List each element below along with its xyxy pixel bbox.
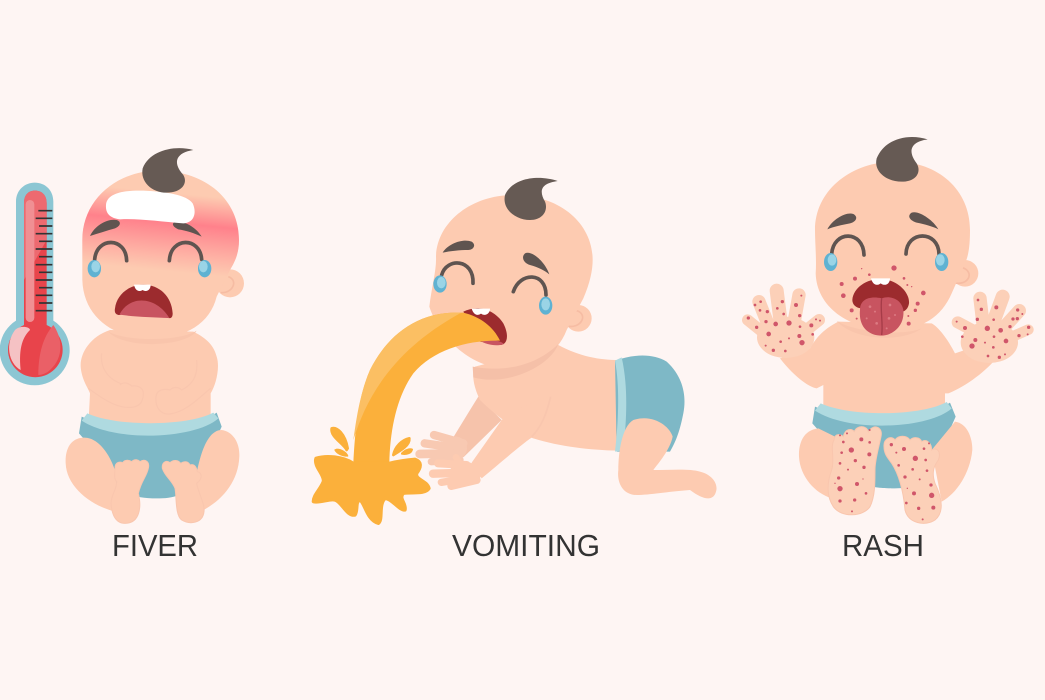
right hand [958, 297, 1028, 363]
cooling cloth [106, 191, 195, 223]
label: fiver: FIVER [112, 528, 198, 563]
mouth and tongue [852, 278, 909, 336]
ear [216, 269, 244, 297]
rash spots [747, 265, 1030, 520]
body and arms [780, 322, 993, 413]
mouth [463, 308, 507, 345]
label: vomiting: VOMITING [452, 528, 600, 563]
fever flush [82, 171, 239, 338]
leg and foot [618, 418, 717, 498]
ear [952, 260, 978, 287]
eyebrows [443, 241, 549, 274]
tears [88, 260, 211, 277]
head [82, 171, 239, 338]
panel: fever baby [0, 148, 244, 523]
body [473, 345, 618, 451]
vomit stream and puddle [313, 312, 500, 523]
neck shadow [837, 321, 922, 338]
eyebrows [827, 212, 938, 229]
baby body [81, 330, 218, 427]
crying eyes [95, 242, 202, 261]
legs [799, 422, 972, 502]
head [815, 162, 970, 330]
head [429, 195, 593, 368]
crying eyes [832, 236, 939, 255]
label: rash: RASH [842, 528, 924, 563]
panel: vomiting baby [313, 178, 717, 523]
hair [505, 178, 558, 220]
diaper [615, 356, 684, 452]
panel: rash baby [747, 137, 1030, 523]
feet [111, 460, 204, 523]
arms and fists outline [88, 353, 211, 414]
left hand [748, 291, 819, 358]
ear [565, 305, 592, 332]
neck shadow [108, 331, 197, 344]
tears [824, 253, 948, 271]
eyebrows [90, 220, 202, 237]
left foot [828, 427, 881, 515]
hair [142, 148, 193, 193]
diaper [79, 413, 222, 498]
hair [876, 137, 928, 182]
tears [433, 275, 552, 315]
neck shadow [473, 344, 558, 380]
far arm and hand [420, 397, 502, 462]
diaper [812, 402, 956, 488]
icon: thermometer [0, 183, 70, 385]
right foot [884, 436, 941, 523]
mouth [115, 285, 173, 318]
legs [66, 430, 239, 513]
near arm and hand [433, 397, 551, 486]
crying eyes [442, 263, 546, 295]
